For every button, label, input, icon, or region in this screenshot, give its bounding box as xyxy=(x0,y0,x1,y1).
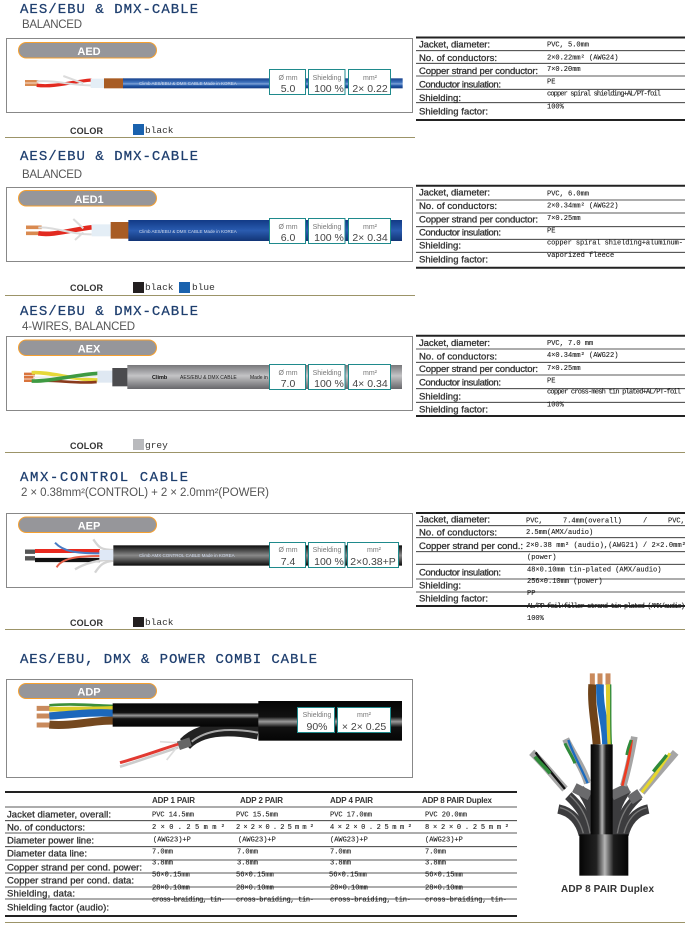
table header xyxy=(152,796,493,805)
AEP spec table: PVC, xyxy=(526,518,543,526)
AEP spec table: PVC, xyxy=(668,518,685,526)
AED spec table: Jacket, diameter: xyxy=(419,40,490,50)
AED1 diameter box: 6.0 xyxy=(281,232,295,244)
AED spec table: 100% xyxy=(547,104,565,112)
ADP comparison table: (AWG23)+P xyxy=(330,836,368,844)
AEP color row: COLOR xyxy=(70,618,104,628)
AED1 name pill: AED1 xyxy=(74,194,104,206)
AED1 name pill xyxy=(18,190,156,206)
table header: ADP 1 PAIR xyxy=(152,796,195,805)
AEP section box xyxy=(348,542,398,568)
AED1 spec table: 2×0.34mm² (AWG22) xyxy=(547,202,618,210)
ADP name pill: ADP xyxy=(77,686,101,698)
AEX color row xyxy=(70,439,168,451)
ADP comparison table: 28×0.10mm xyxy=(236,884,274,892)
ADP comparison table: Shielding, data: xyxy=(7,888,75,900)
section 4 title: AMX-CONTROL CABLE xyxy=(20,470,188,486)
ADP comparison table: Copper strand per cond. data: xyxy=(7,876,134,886)
section 3 subtitle: 4-WIRES, BALANCED xyxy=(22,321,135,333)
AEX spec table xyxy=(416,336,685,416)
ADP comparison table: cross-braiding, tin- xyxy=(152,896,225,904)
AEX section box: 4× 0.34 xyxy=(352,378,388,390)
AED1 spec table: Conductor insulation: xyxy=(419,228,501,238)
AEP spec table: PP xyxy=(527,590,535,598)
table header: ADP 4 PAIR xyxy=(330,796,373,805)
AEP spec table: Copper strand per cond.: xyxy=(419,541,523,552)
AEP diameter box: Ø mm xyxy=(278,547,298,554)
illustration caption: ADP 8 PAIR Duplex xyxy=(561,884,654,895)
ADP comparison table: cross-braiding, tin- xyxy=(236,896,314,904)
AEP spec table: 2×0.38 mm² (audio),(AWG21) / 2×2.0mm² xyxy=(526,542,686,550)
AEX section box: mm² xyxy=(363,370,378,377)
AED1 diameter box xyxy=(270,218,306,244)
panel: AEP cable xyxy=(6,514,412,588)
AEX spec table: copper cross-mesh tin plated+AL/PT-foil xyxy=(547,388,681,396)
AEX shielding box xyxy=(308,364,345,390)
ADP comparison table: 56×0.15mm xyxy=(425,872,463,880)
AED1 cable illustration xyxy=(26,219,402,241)
ADP comparison table: 7.0mm xyxy=(152,848,173,856)
AED1 section box xyxy=(348,218,390,244)
AED1 spec table: Jacket, diameter: xyxy=(419,188,490,198)
panel: AED1 cable: Climb AES/EBU & DMX CABLE Made in KOREA xyxy=(139,229,237,234)
AED1 spec table: 7×0.25mm xyxy=(547,215,581,223)
ADP section box: × 2× 0.25 xyxy=(342,721,386,733)
AEX cable illustration xyxy=(24,365,402,389)
AEP spec table: 256×0.10mm (power) xyxy=(527,578,603,586)
ADP comparison table: Jacket diameter, overall: xyxy=(7,810,111,820)
AED shielding box: 100 % xyxy=(314,83,344,95)
illustration: ADP 8 pair duplex cable xyxy=(532,673,676,876)
AED1 shielding box xyxy=(308,218,345,244)
ADP comparison table: cross-braiding, tin- xyxy=(330,896,411,904)
AEX spec table: 4×0.34mm² (AWG22) xyxy=(547,352,618,360)
panel: AEX cable: Climb xyxy=(152,375,168,381)
ADP comparison table: Copper strand per cond. power: xyxy=(7,862,142,874)
AED1 spec table: PVC, 6.0mm xyxy=(547,190,589,198)
ADP comparison table: 2 × 0 . 2 5 m m ² xyxy=(152,824,225,832)
section 1 title: AES/EBU & DMX-CABLE xyxy=(20,2,198,18)
ADP comparison table: 8 × 2 × 0 . 2 5 m m ² xyxy=(425,824,509,832)
AED1 shielding box: 100 % xyxy=(314,232,344,244)
section 1 subtitle: BALANCED xyxy=(22,19,82,31)
ADP comparison table: (AWG23)+P xyxy=(238,836,276,844)
ADP shielding box: Shielding xyxy=(303,712,332,719)
AED color row xyxy=(70,124,174,136)
section 3 title: AES/EBU & DMX-CABLE xyxy=(20,304,198,320)
ADP comparison table: 3.8mm xyxy=(425,860,446,868)
AED1 color row: blue xyxy=(192,282,215,293)
AED spec table: No. of conductors: xyxy=(419,53,497,64)
ADP comparison table: PVC 20.0mm xyxy=(425,812,467,820)
panel: ADP cable xyxy=(6,680,412,778)
AEP shielding box: 100 % xyxy=(314,556,344,568)
AED shielding box xyxy=(308,70,345,95)
panel: AEX cable xyxy=(6,336,412,410)
AEX color row: COLOR xyxy=(70,441,104,451)
panel: AED cable: Climb AES/EBU & DMX CABLE Made in KOREA xyxy=(139,81,237,86)
AED1 shielding box: Shielding xyxy=(313,224,342,231)
AEP spec table: 100% xyxy=(527,615,545,623)
ADP comparison table: 28×0.10mm xyxy=(425,884,463,892)
AEX spec table: 7×0.25mm xyxy=(547,365,581,373)
AED1 spec table: vaporized fleece xyxy=(547,252,614,260)
AED1 color row: COLOR xyxy=(70,283,104,293)
AEP spec table: 2.5mm(AMX/audio) xyxy=(526,529,593,537)
AED spec table: Conductor insulation: xyxy=(419,80,501,90)
AEP diameter box: 7.4 xyxy=(281,556,295,568)
AED name pill: AED xyxy=(77,46,101,58)
AEP spec table xyxy=(416,513,686,623)
ADP comparison table: 3.8mm xyxy=(330,860,351,868)
ADP comparison table: cross-braiding, tin- xyxy=(425,896,507,904)
ADP comparison table: PVC 17.0mm xyxy=(330,812,372,820)
AEP spec table: No. of conductors: xyxy=(419,528,497,538)
AEP spec table: AL/PP-foil+filler strand tin-plated (AMX/audio) xyxy=(527,603,685,611)
AED1 section box: 2× 0.34 xyxy=(352,232,388,244)
ADP comparison table: 7.0mm xyxy=(330,848,351,856)
ADP shielding box xyxy=(298,708,334,733)
ADP comparison table: 28×0.10mm xyxy=(152,884,190,892)
AEX shielding box: 100 % xyxy=(314,378,344,390)
AED1 section box: mm² xyxy=(363,224,378,231)
AEX spec table: Shielding factor: xyxy=(419,404,488,416)
section 4 subtitle: 2 × 0.38mm²(CONTROL) + 2 × 2.0mm²(POWER) xyxy=(21,487,269,499)
AEP diameter box xyxy=(270,542,306,568)
AEP spec table: Conductor insulation: xyxy=(419,568,501,578)
section 2 subtitle: BALANCED xyxy=(22,169,82,181)
AEX spec table: PE xyxy=(547,378,555,386)
AED spec table: Shielding: xyxy=(419,93,461,104)
AED1 color row xyxy=(70,282,215,293)
AEX color row: grey xyxy=(145,440,168,451)
ADP comparison table: 4 × 2 × 0 . 2 5 m m ² xyxy=(330,824,412,832)
AEX diameter box xyxy=(270,364,306,390)
ADP name pill xyxy=(18,684,156,698)
ADP comparison table: 7.0mm xyxy=(237,848,258,856)
AED1 spec table: PE xyxy=(547,228,555,236)
AEP spec table: / xyxy=(643,518,647,526)
AED spec table: copper spiral shielding+AL/PT-foil xyxy=(547,90,661,98)
ADP comparison table: Diameter power line: xyxy=(7,836,94,846)
ADP comparison table: No. of conductors: xyxy=(7,822,85,834)
AEX spec table: 100% xyxy=(547,402,565,410)
AEP spec table: Jacket, diameter: xyxy=(419,514,490,526)
AEP section box: mm² xyxy=(367,547,382,554)
ADP comparison table: Shielding factor (audio): xyxy=(7,902,109,914)
AED spec table xyxy=(416,38,685,120)
AED diameter box xyxy=(270,70,306,95)
AEX diameter box: Ø mm xyxy=(278,370,298,377)
AED cable illustration xyxy=(25,76,403,88)
ADP comparison table: 56×0.15mm xyxy=(329,872,367,880)
AEX spec table: Copper strand per conductor: xyxy=(419,364,538,375)
AED1 spec table: No. of conductors: xyxy=(419,201,497,212)
AED diameter box: Ø mm xyxy=(278,75,298,82)
AED1 color row: black xyxy=(145,282,174,293)
panel: AEX cable: AES/EBU & DMX CABLE xyxy=(180,375,237,381)
AED1 spec table: copper spiral shielding+aluminum- xyxy=(547,240,683,248)
AEX shielding box: Shielding xyxy=(313,370,342,377)
ADP shielding box: 90% xyxy=(306,721,328,733)
AEX diameter box: 7.0 xyxy=(281,378,295,390)
ADP comparison table xyxy=(5,792,517,916)
ADP comparison table: 2 × 2 × 0 . 2 5 m m ² xyxy=(236,824,314,832)
AED section box: mm² xyxy=(363,75,378,82)
table header: ADP 8 PAIR Duplex xyxy=(422,796,493,805)
AED spec table: 7×0.20mm xyxy=(547,66,581,74)
AED1 spec table xyxy=(416,186,685,268)
AED1 spec table: Copper strand per conductor: xyxy=(419,214,538,226)
AEP shielding box xyxy=(308,542,345,568)
AEP cable illustration xyxy=(25,539,402,573)
AED shielding box: Shielding xyxy=(313,75,342,82)
AEP spec table: 48×0.10mm tin-plated (AMX/audio) xyxy=(527,566,661,574)
AED1 diameter box: Ø mm xyxy=(278,224,298,231)
ADP comparison table: 56×0.15mm xyxy=(152,872,190,880)
ADP comparison table: Diameter data line: xyxy=(7,848,87,860)
AED spec table: Copper strand per conductor: xyxy=(419,66,538,77)
ADP section box: mm² xyxy=(357,712,372,719)
AEP name pill xyxy=(18,517,156,532)
AEX spec table: Shielding: xyxy=(419,392,461,402)
AED color row: black xyxy=(145,125,174,136)
ADP comparison table: (AWG23)+P xyxy=(153,836,191,844)
ADP comparison table: 3.8mm xyxy=(237,860,258,868)
ADP comparison table: 3.8mm xyxy=(152,860,173,868)
AEX spec table: PVC, 7.0 mm xyxy=(547,340,593,348)
AED spec table: Shielding factor: xyxy=(419,106,488,118)
panel: AED1 cable xyxy=(6,188,412,262)
ADP cable illustration xyxy=(37,701,402,767)
section 2 title: AES/EBU & DMX-CABLE xyxy=(20,149,198,165)
AED1 spec table: Shielding: xyxy=(419,240,461,252)
AEX spec table: No. of conductors: xyxy=(419,352,497,362)
panel: AEX cable: Made in xyxy=(250,375,268,381)
AEX name pill: AEX xyxy=(78,344,101,356)
AEP section box: 2×0.38+P xyxy=(350,556,396,568)
ADP comparison table: PVC 15.5mm xyxy=(236,812,278,820)
AED spec table: 2×0.22mm² (AWG24) xyxy=(547,54,618,62)
section 5 title: AES/EBU, DMX & POWER COMBI CABLE xyxy=(20,652,317,668)
AED1 spec table: Shielding factor: xyxy=(419,254,488,266)
AEP name pill: AEP xyxy=(78,520,100,532)
AED spec table: PVC, 5.0mm xyxy=(547,42,589,50)
AEX spec table: Conductor insulation: xyxy=(419,378,501,388)
AEX name pill xyxy=(18,340,156,356)
ADP comparison table: (AWG23)+P xyxy=(425,836,463,844)
AEP spec table: Shielding: xyxy=(419,580,461,592)
AEP spec table: 7.4mm(overall) xyxy=(563,518,622,526)
AED name pill xyxy=(18,42,156,58)
ADP comparison table: 7.0mm xyxy=(425,848,446,856)
AEX section box xyxy=(348,364,390,390)
AED diameter box: 5.0 xyxy=(281,83,295,95)
AEP spec table: Shielding factor: xyxy=(419,594,488,604)
ADP comparison table: PVC 14.5mm xyxy=(152,812,194,820)
AEX spec table: Jacket, diameter: xyxy=(419,338,490,349)
AED color row: COLOR xyxy=(70,126,104,136)
AEP shielding box: Shielding xyxy=(313,547,342,554)
table header: ADP 2 PAIR xyxy=(240,796,283,805)
ADP section box xyxy=(338,708,390,733)
panel: AED cable xyxy=(6,38,412,112)
AEP spec table: (power) xyxy=(527,554,556,562)
AEP color row: black xyxy=(145,617,174,628)
panel: AEP cable: Climb AMX CONTROL CABLE Made in KOREA xyxy=(139,553,235,558)
AEP color row xyxy=(70,617,174,628)
AED section box: 2× 0.22 xyxy=(352,83,388,95)
AED spec table: PE xyxy=(547,78,555,86)
AED section box xyxy=(348,70,390,95)
ADP comparison table: 28×0.10mm xyxy=(330,884,368,892)
ADP comparison table: 56×0.15mm xyxy=(236,872,274,880)
